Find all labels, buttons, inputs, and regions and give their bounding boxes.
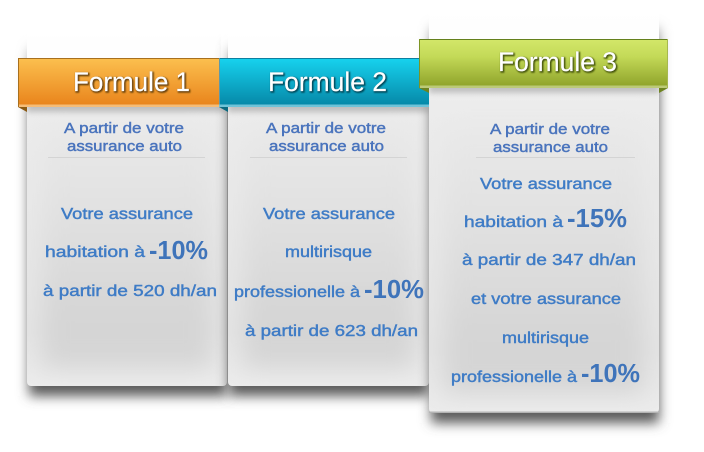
- text block: formule 2 subtitle: [266, 120, 386, 155]
- heading: formule 3: Formule 3: [499, 48, 618, 78]
- text block: formule 1 offer: [43, 206, 217, 300]
- heading: formule 1: Formule 1: [74, 68, 191, 98]
- ribbon: formule 2: [219, 58, 429, 112]
- text block: formule 1 subtitle: A partir de votre: [64, 120, 184, 137]
- text block: formule 1 subtitle: [64, 120, 184, 155]
- text block: formule 3 offer: à partir de 347 dh/an: [462, 252, 636, 269]
- text block: formule 2 offer: -10%: [364, 274, 424, 304]
- text block: formule 3 offer: [451, 176, 640, 388]
- text block: formule 1 offer: à partir de 520 dh/an: [43, 283, 217, 300]
- text block: formule 3 offer: -10%: [581, 358, 640, 388]
- text block: formule 1 offer: habitation à: [45, 244, 145, 261]
- text block: formule 3 subtitle: [490, 121, 610, 156]
- text block: formule 2 offer: à partir de 623 dh/an: [245, 323, 418, 340]
- text block: formule 1 subtitle: assurance auto: [67, 138, 182, 155]
- text block: formule 2 subtitle: assurance auto: [269, 138, 384, 155]
- ribbon: formule 1: [18, 58, 219, 112]
- heading: formule 1: Formule 1: [73, 67, 190, 97]
- panel: formule 1 card: [14, 20, 240, 396]
- heading: formule 2: Formule 2: [268, 67, 387, 97]
- text block: formule 2 subtitle: A partir de votre: [266, 120, 386, 137]
- text block: formule 3 offer: multirisque: [502, 330, 589, 347]
- text block: formule 3 offer: -15%: [567, 203, 627, 233]
- text block: formule 2 offer: Votre assurance: [263, 206, 395, 223]
- text block: formule 2 offer: [234, 206, 424, 340]
- text block: formule 2 offer: multirisque: [285, 244, 372, 261]
- text block: formule 3 offer: et votre assurance: [471, 291, 621, 308]
- ribbon: formule 3: [419, 39, 668, 93]
- text block: formule 3 offer: professionelle à: [451, 369, 577, 386]
- text block: formule 1 offer: Votre assurance: [61, 206, 193, 223]
- panel: formule 3 card: [416, 0, 674, 423]
- text block: formule 3 offer: Votre assurance: [480, 176, 612, 193]
- text block: formule 1 offer: -10%: [149, 235, 208, 265]
- text block: formule 2 offer: professionelle à: [234, 284, 360, 301]
- heading: formule 2: Formule 2: [269, 68, 388, 98]
- text block: formule 3 subtitle: assurance auto: [493, 139, 608, 156]
- heading: formule 3: Formule 3: [498, 47, 617, 77]
- text block: formule 3 subtitle: A partir de votre: [490, 121, 610, 138]
- panel: formule 2 card: [221, 20, 429, 396]
- text block: formule 3 offer: habitation à: [464, 214, 563, 231]
